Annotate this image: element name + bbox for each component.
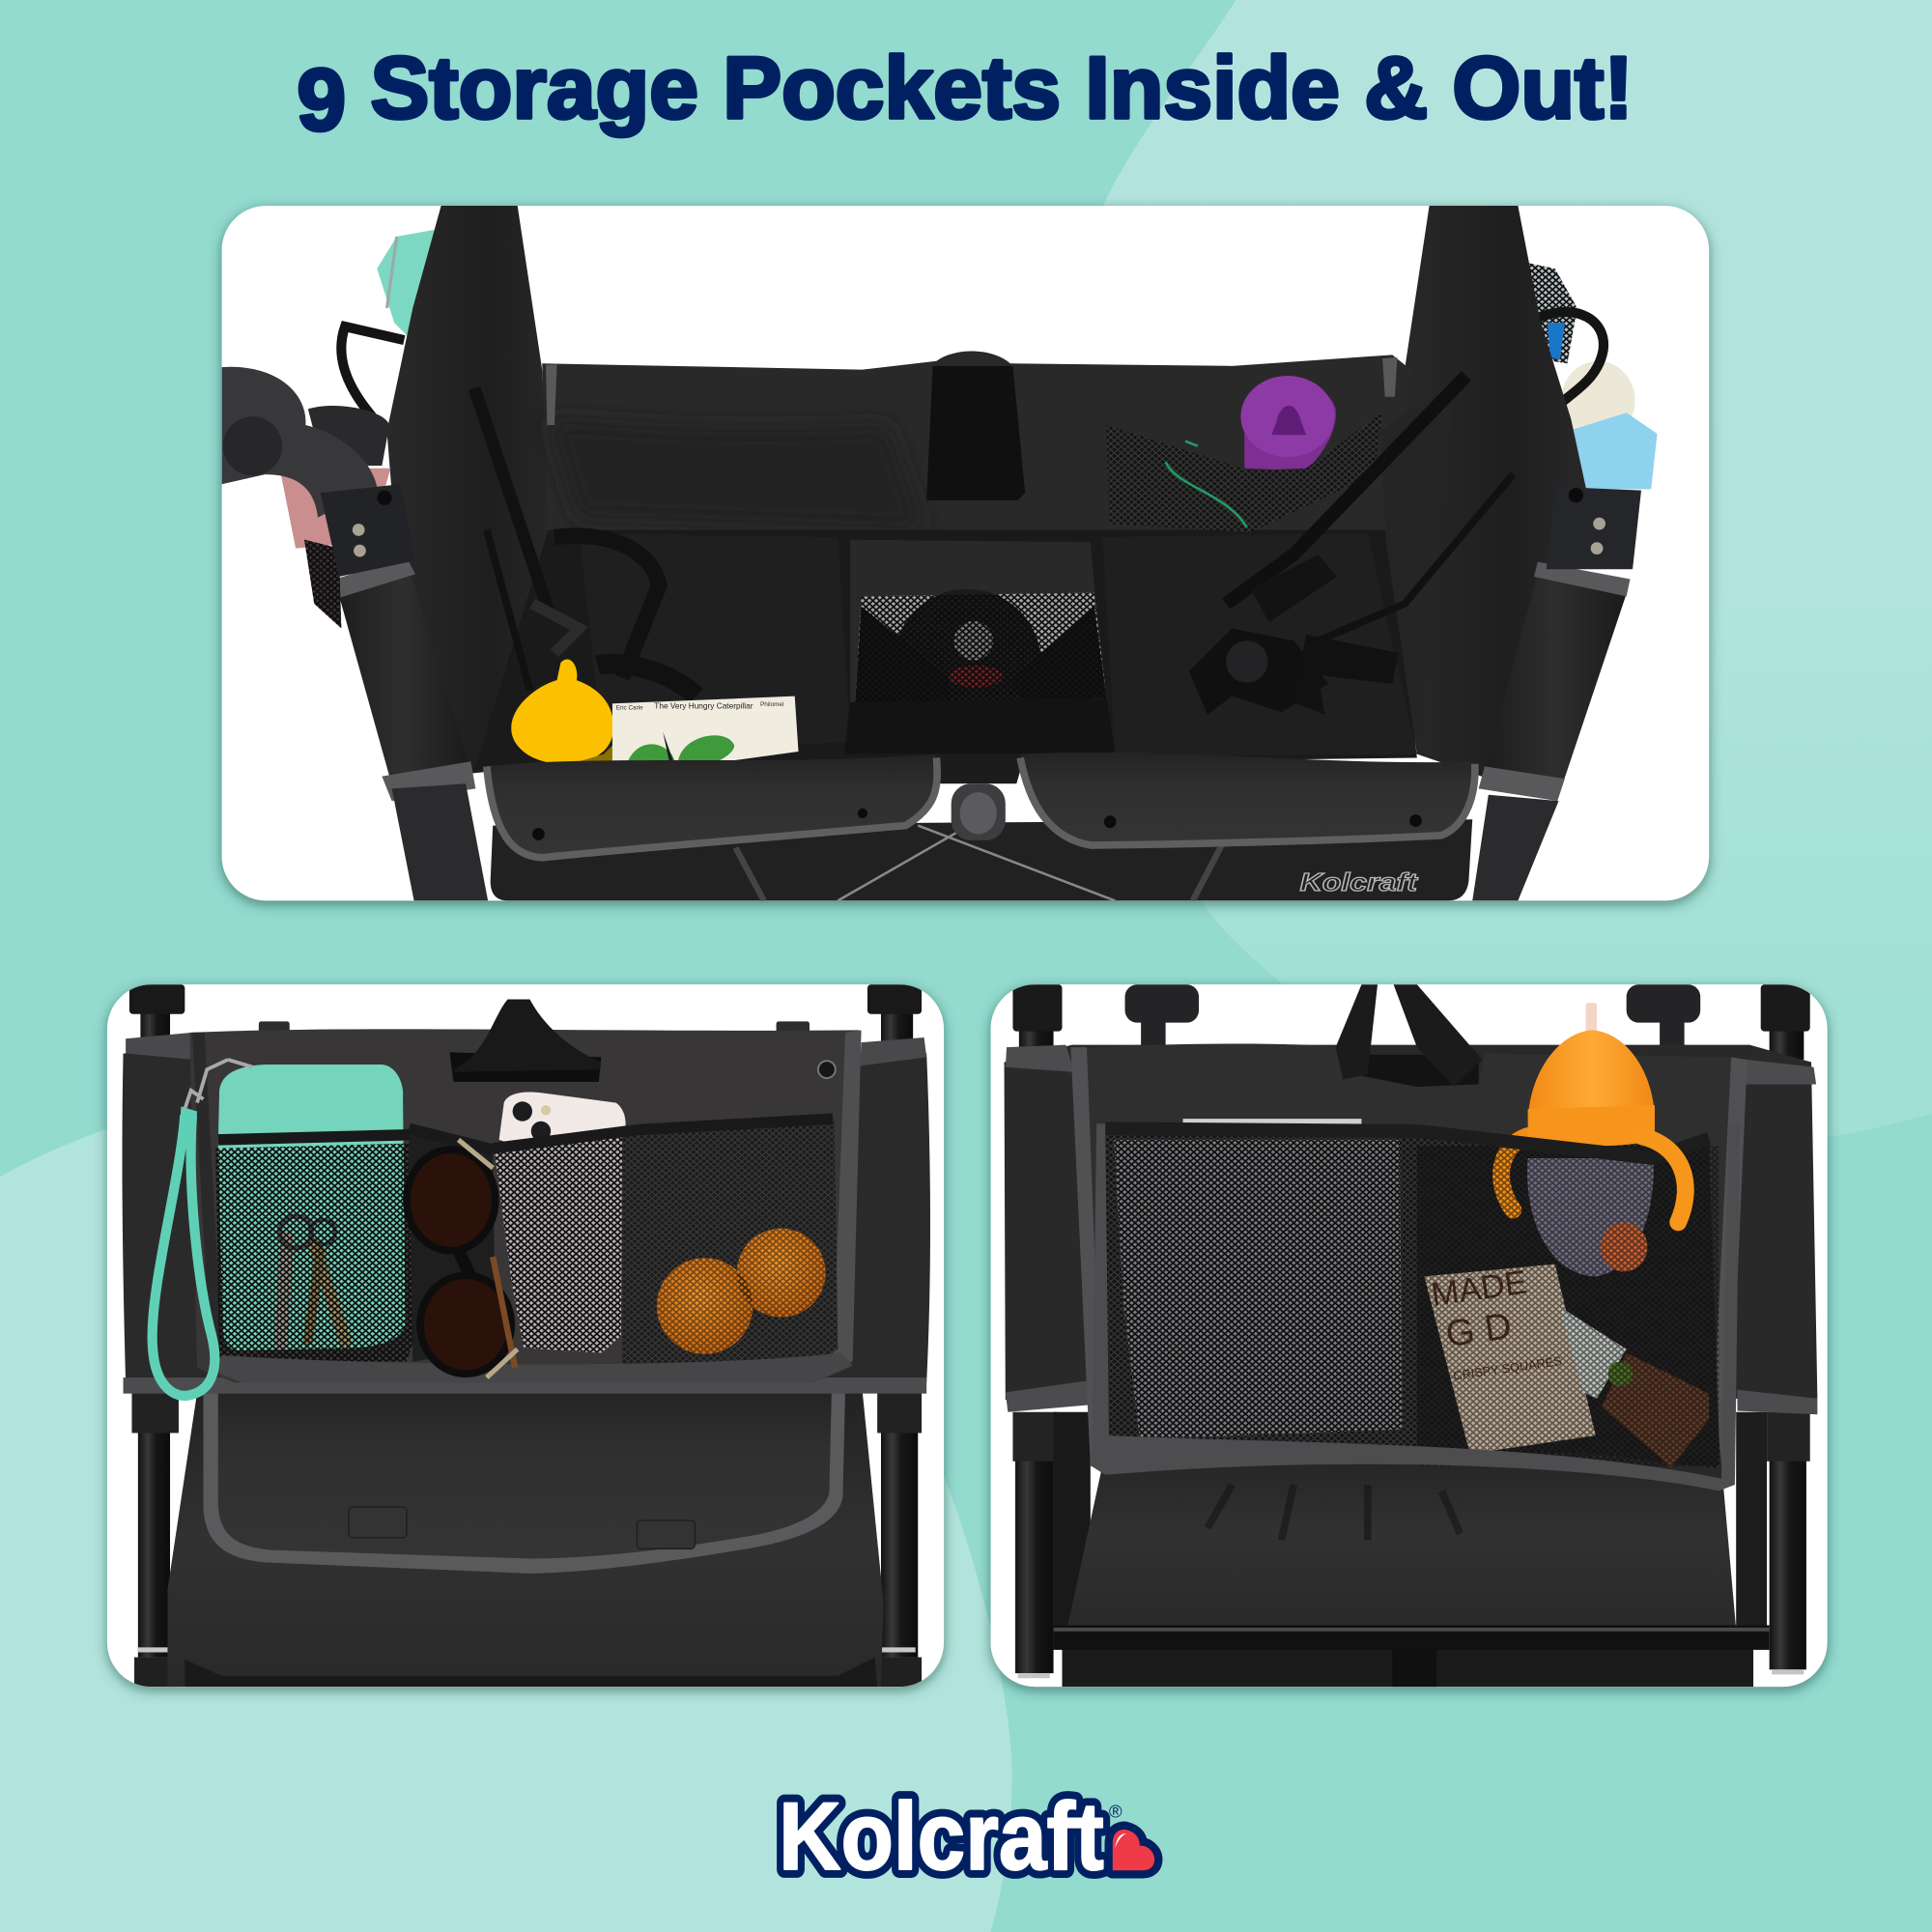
logo wordmark: Kolcraft bbox=[779, 1783, 1104, 1890]
centre seat section bbox=[844, 540, 1115, 754]
lower gathered bag bbox=[1067, 1435, 1736, 1629]
teal wallet bbox=[218, 1065, 406, 1350]
centre panel bbox=[1070, 1044, 1747, 1479]
pocket elastic bands bbox=[218, 1119, 833, 1150]
right padded post bbox=[1479, 562, 1631, 801]
item: plush toy and blue blanket bbox=[1561, 361, 1658, 489]
folded grey blanket bbox=[1114, 1119, 1403, 1439]
cup collar bbox=[1528, 1105, 1655, 1147]
lower storage bag bbox=[167, 1392, 884, 1687]
oranges bbox=[657, 1229, 826, 1354]
pocket four interior mesh bbox=[622, 1122, 838, 1368]
lower rail and base bbox=[1054, 1625, 1770, 1687]
orange sippy cup bbox=[1501, 1003, 1655, 1276]
item: yellow sippy bottle bbox=[511, 660, 618, 764]
item: black side strap left bbox=[341, 327, 404, 416]
logo heart backing bbox=[1113, 1830, 1154, 1870]
elastic edge of pocket bbox=[1105, 1128, 1709, 1158]
upper padded band bbox=[122, 1033, 930, 1394]
bag base fold bbox=[185, 1658, 877, 1687]
pocket three with grey cloth bbox=[494, 1136, 622, 1353]
snack bag: MADE bbox=[1429, 1264, 1529, 1314]
item: board book bbox=[612, 696, 798, 761]
back wall bbox=[542, 352, 1410, 549]
logo heart bbox=[1113, 1830, 1154, 1870]
upper padded sides bbox=[1005, 1045, 1817, 1414]
front centre bolt bbox=[940, 763, 1020, 840]
mesh pocket with wheel seen through bbox=[855, 589, 1107, 702]
item: board book: Eric Carle bbox=[616, 705, 643, 712]
registered mark: ® bbox=[1109, 1801, 1122, 1821]
back handle knobs bbox=[1125, 984, 1700, 1047]
item: mesh side pocket right bbox=[1529, 263, 1577, 363]
title: Storage Pockets Inside & Out! bbox=[346, 39, 1634, 137]
pocket two interior bbox=[409, 1131, 496, 1361]
frame poles bbox=[129, 984, 922, 1687]
cup left handle bbox=[1501, 1136, 1528, 1210]
logo outline: Kolcraft bbox=[779, 1783, 1104, 1890]
pocket bottom hem bbox=[212, 1353, 853, 1382]
right leg bbox=[1472, 795, 1559, 900]
front left flap bbox=[487, 754, 937, 858]
back mesh pocket with purple sippy lid and glasses bbox=[1106, 376, 1382, 532]
snack bag: CRISPY SQUARES bbox=[1452, 1353, 1563, 1383]
left wall bbox=[387, 206, 557, 774]
title: 9 bbox=[297, 51, 346, 150]
mesh pocket interior bbox=[1105, 1133, 1720, 1468]
panel: top photo, interior pockets bbox=[222, 206, 1709, 900]
item: teal wallet hanging on left side bbox=[377, 230, 435, 336]
cup right handle bbox=[1641, 1136, 1686, 1222]
logo: Kolcraft bbox=[779, 1783, 1154, 1890]
lower storage bag bbox=[491, 819, 1472, 900]
item: board book: The Very Hungry Caterpillar bbox=[654, 700, 753, 710]
snack bar bbox=[1559, 1306, 1709, 1467]
pocket border bbox=[1092, 1123, 1740, 1491]
phone in pocket bbox=[499, 1092, 626, 1146]
panel: bottom right photo, outer pockets bbox=[991, 984, 1828, 1687]
front right flap bbox=[1020, 753, 1475, 845]
floor bbox=[512, 529, 1417, 763]
mesh over right pocket bbox=[1417, 1146, 1719, 1466]
lower pocket flap bbox=[203, 1389, 845, 1574]
left handle with knob and cup bbox=[222, 367, 415, 629]
cup body bbox=[1527, 1158, 1654, 1276]
back centre strap bbox=[926, 366, 1025, 500]
sunglasses bbox=[407, 1140, 518, 1378]
snack bag bbox=[1424, 1264, 1596, 1454]
snap button bbox=[818, 1061, 836, 1078]
right wall bbox=[1392, 206, 1587, 779]
right harness straps and buckle bbox=[1189, 376, 1513, 715]
panel: bottom left photo, outer pockets bbox=[107, 984, 944, 1687]
left harness strap and buckle bbox=[474, 388, 696, 696]
item: loop strap right bbox=[1538, 312, 1604, 402]
brand mark on bag: Kolcraft bbox=[1300, 869, 1419, 896]
left padded post bbox=[335, 557, 475, 801]
carry handle and slot bbox=[450, 999, 601, 1082]
keys bbox=[280, 1216, 345, 1343]
pocket one mesh bbox=[215, 1144, 412, 1361]
carry handle straps bbox=[1336, 984, 1482, 1087]
centre pocket panel bbox=[189, 1029, 862, 1382]
snack bag: G D bbox=[1443, 1305, 1514, 1355]
frame poles bbox=[1012, 984, 1810, 1678]
wristlet strap and clasp bbox=[153, 1060, 252, 1396]
left leg bbox=[392, 783, 488, 900]
right handle block bbox=[1547, 487, 1641, 569]
item: board book: Philomel bbox=[760, 701, 783, 708]
